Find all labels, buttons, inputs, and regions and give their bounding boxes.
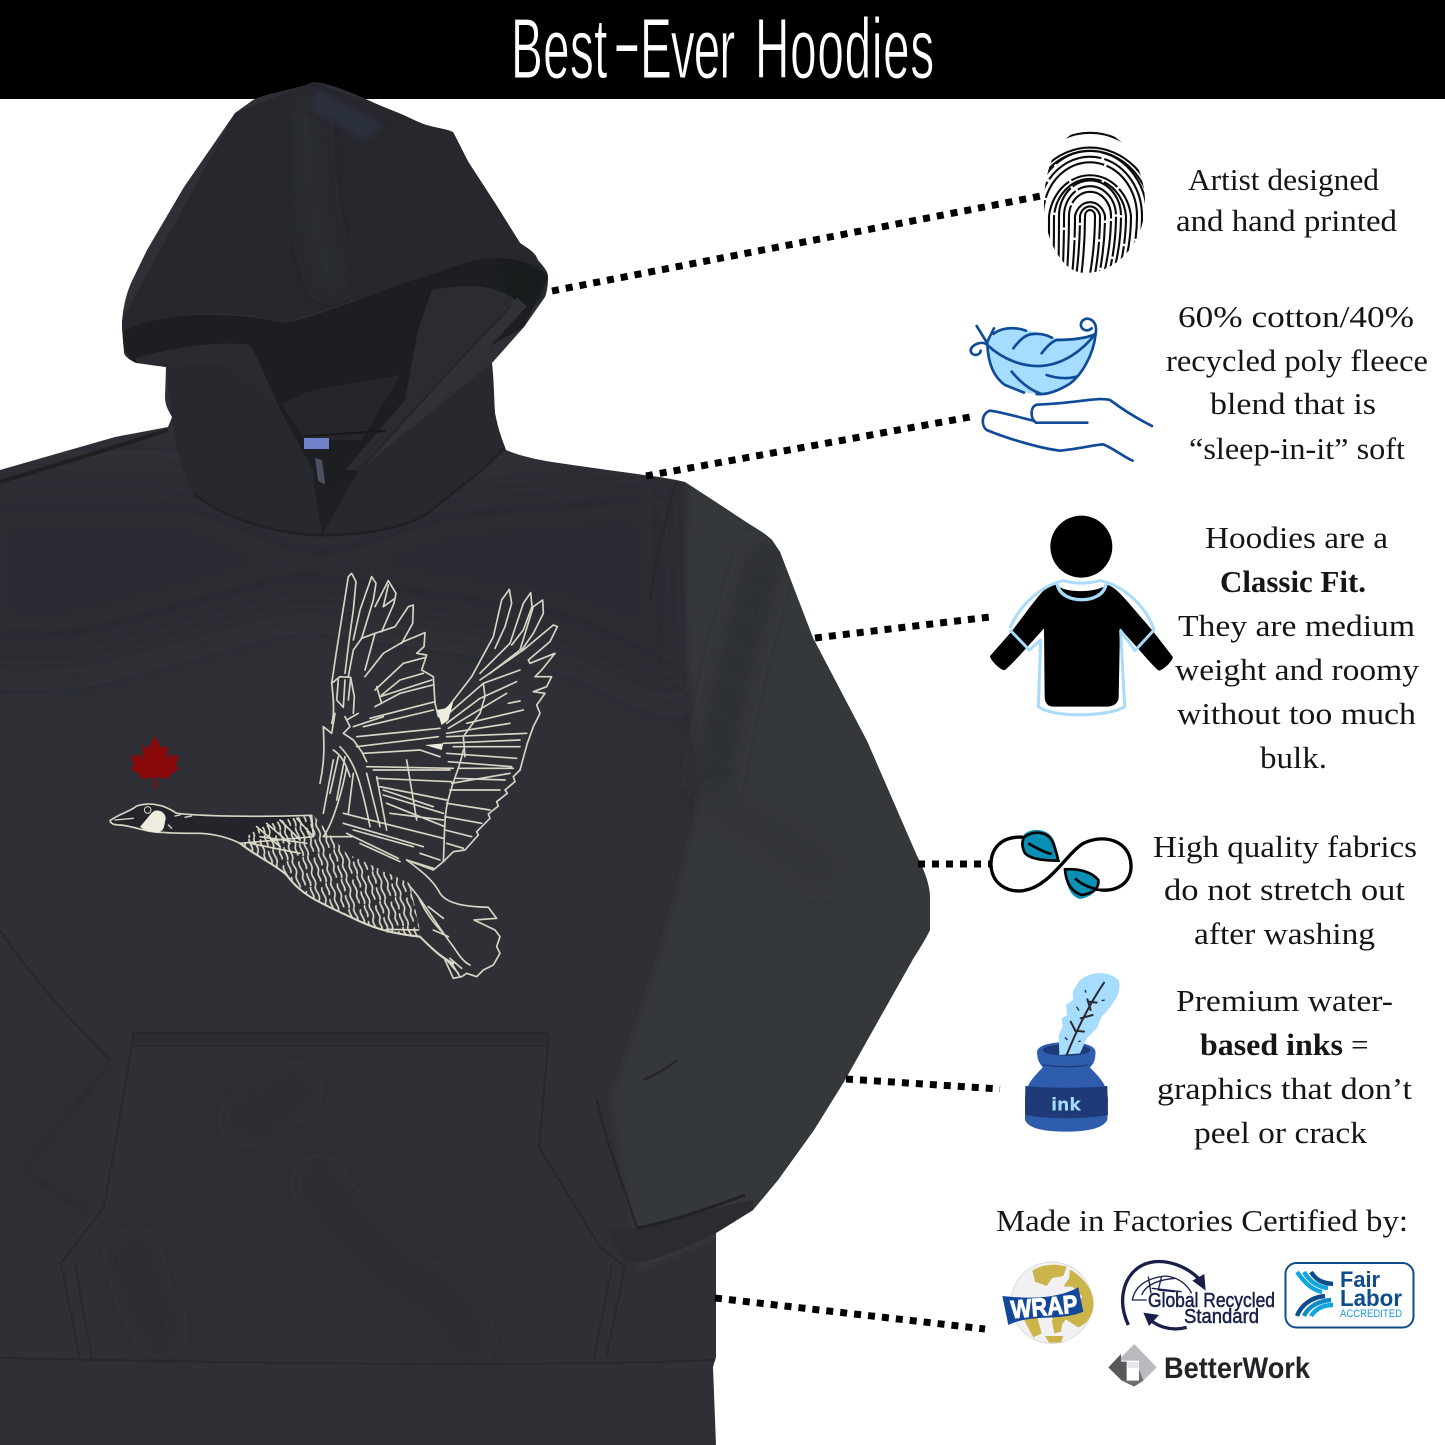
icon: feather over hand (971, 319, 1152, 461)
pocket folds (130, 1080, 478, 1350)
text: water-based inks: peel or crack (1194, 1115, 1368, 1150)
text: classic fit (1175, 520, 1420, 775)
dotted connector: hem to certifications (715, 1298, 985, 1329)
right cuff (597, 1060, 677, 1228)
text: high quality fabrics: do not stretch out (1164, 872, 1405, 907)
shoulder band (0, 430, 168, 482)
logo: Fair Labor Accredited (1286, 1263, 1414, 1328)
dotted connector: hood to fingerprint (552, 195, 1046, 291)
text: water-based inks (1157, 983, 1412, 1150)
logo: BetterWork: BetterWork (1164, 1352, 1310, 1385)
torso shading (0, 458, 691, 486)
logo: Global Recycled Standard: Standard (1184, 1306, 1259, 1328)
hood opening (122, 258, 547, 490)
text: classic fit: They are medium (1178, 608, 1415, 643)
title: Best (511, 1, 607, 97)
text: high quality fabrics (1153, 829, 1417, 951)
text: artist designed (1176, 162, 1398, 238)
right hood lining (345, 286, 516, 470)
far wing lower feathers (407, 750, 520, 870)
logo: WRAP (1002, 1262, 1094, 1343)
far wing upper feathers (437, 589, 557, 770)
text: high quality fabrics: after washing (1194, 916, 1375, 951)
text: fleece blend: blend that is (1210, 386, 1376, 421)
hood base and gusset (172, 364, 505, 496)
dotted connector: shoulder to feather (646, 417, 970, 476)
icon: ink bottle with quill: ink (1051, 1096, 1081, 1116)
text: high quality fabrics: High quality fabrics (1153, 829, 1417, 864)
text: classic fit: without too much (1177, 696, 1417, 731)
goose tail and leg (407, 860, 500, 978)
title: Ever (640, 1, 735, 97)
icon: fingerprint (1044, 132, 1146, 273)
logo: WRAP: WRAP (1010, 1291, 1079, 1324)
text: water-based inks: based inks (1200, 1027, 1343, 1062)
text: water-based inks: graphics that don’t (1157, 1071, 1412, 1106)
hood outer shell (122, 82, 548, 335)
icon: person in classic fit shirt (990, 516, 1173, 715)
text: water-based inks: = (1351, 1027, 1368, 1062)
text: fleece blend (1166, 299, 1428, 466)
logo: Fair Labor Accredited: ACCREDITED (1340, 1308, 1402, 1320)
icon: infinity with leaves (991, 830, 1131, 899)
goose print with maple leaf (110, 573, 557, 978)
logo: Fair Labor Accredited: Fair (1340, 1267, 1380, 1292)
text: fleece blend: recycled poly fleece (1166, 343, 1428, 378)
dotted connector: sleeve to infinity icon (918, 860, 990, 868)
text: classic fit: Classic Fit. (1220, 564, 1366, 599)
logo: BetterWork (1108, 1344, 1310, 1387)
goose body (240, 815, 453, 963)
near wing lower feathers (323, 747, 452, 868)
text: classic fit: Hoodies are a (1205, 520, 1388, 555)
text: classic fit: bulk. (1260, 740, 1327, 775)
label (304, 438, 329, 449)
logo: Global Recycled Standard: Global Recycled (1148, 1290, 1275, 1312)
left hood flap (136, 344, 281, 412)
text: classic fit: weight and roomy (1175, 652, 1420, 687)
text: water-based inks: Premium water- (1176, 983, 1393, 1018)
text: fleece blend: “sleep-in-it” soft (1189, 431, 1405, 466)
text: artist designed: Artist designed (1188, 162, 1380, 197)
title: Hoodies (755, 1, 934, 97)
near wing upper feathers (320, 573, 453, 783)
neck interior (282, 375, 400, 440)
left sleeve folds (0, 930, 110, 1060)
text: artist designed: and hand printed (1176, 203, 1398, 238)
goose head and neck (110, 804, 313, 843)
logo: Fair Labor Accredited: Labor (1340, 1285, 1402, 1311)
hem (0, 1358, 716, 1364)
right sleeve (610, 470, 950, 1270)
icon: ink bottle with quill (1025, 973, 1120, 1132)
dotted connector: print to ink icon (846, 1079, 1000, 1089)
logo: Global Recycled Standard (1123, 1262, 1275, 1329)
text: fleece blend: 60% cotton/40% (1178, 299, 1414, 334)
dotted connector: sleeve to fit icon (815, 617, 990, 638)
title (511, 0, 934, 97)
icon: maple leaf (131, 736, 179, 788)
pocket (132, 1033, 549, 1046)
heading: certifications: Made in Factories Certified by: (996, 1203, 1408, 1238)
